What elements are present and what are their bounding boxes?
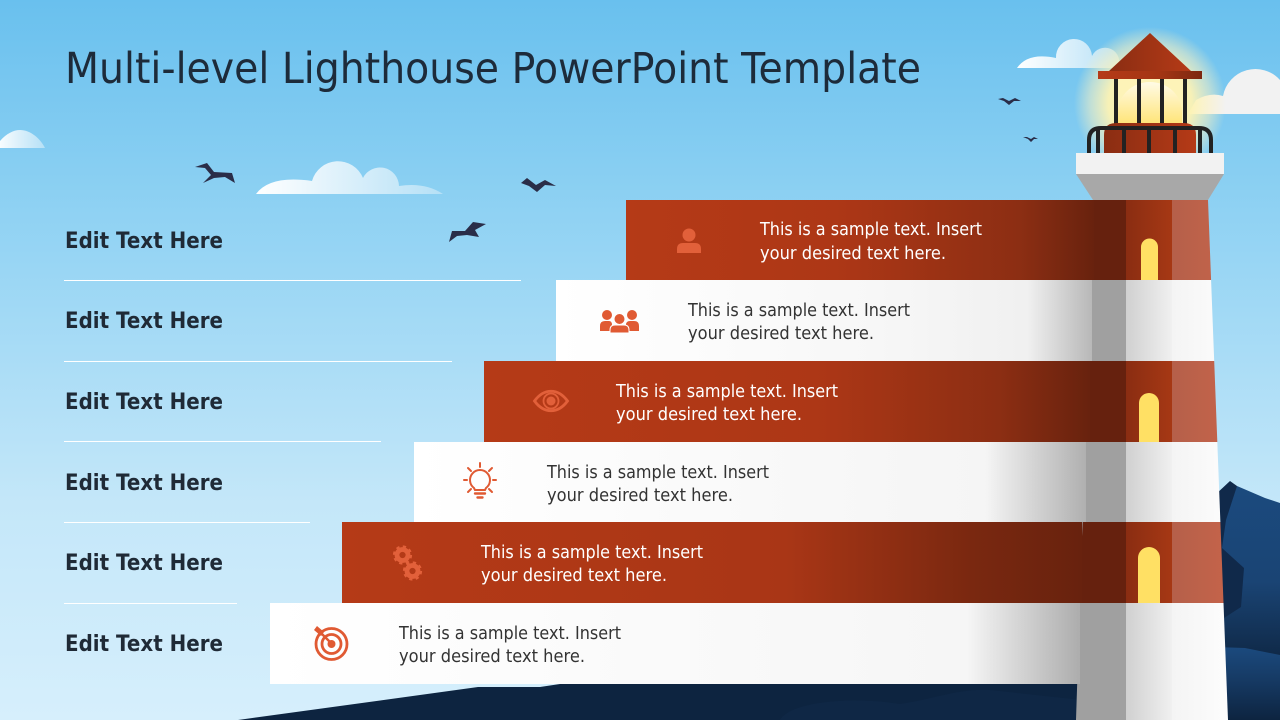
- railing: [1089, 128, 1211, 153]
- label 6: Edit Text Here: [65, 632, 223, 657]
- row 1 text: [759, 220, 982, 264]
- label 1: Edit Text Here: [65, 229, 223, 254]
- row 1 text: your desired text here.: [760, 244, 946, 264]
- icon: eye: [534, 391, 568, 411]
- ground: dark shoreline: [238, 684, 1082, 720]
- icon: person: [677, 228, 701, 253]
- window 1: [1141, 239, 1158, 280]
- window 2: [1139, 393, 1159, 442]
- icon: light bulb: [464, 463, 496, 498]
- bird 3: [449, 222, 486, 242]
- bird 5: [1023, 137, 1038, 142]
- row 4 text: This is a sample text. Insert: [546, 463, 769, 483]
- row 3 text: This is a sample text. Insert: [615, 382, 838, 402]
- tower body with bands: [1076, 200, 1228, 720]
- title: Multi-level Lighthouse PowerPoint Template: [65, 44, 921, 94]
- row 2 band: [556, 280, 1092, 361]
- gallery deck: [1076, 153, 1224, 174]
- divider 4: [64, 522, 310, 523]
- cloud: right of lighthouse: [1188, 69, 1280, 114]
- row 2 text: [687, 301, 910, 344]
- window 3: [1138, 547, 1160, 603]
- row 6 text: your desired text here.: [399, 647, 585, 667]
- divider 2: [64, 361, 452, 362]
- bird 2: [521, 178, 556, 192]
- lighthouse: [1074, 27, 1226, 200]
- lantern glow: [1074, 27, 1226, 179]
- row 5 text: This is a sample text. Insert: [480, 543, 703, 563]
- lantern base: [1104, 123, 1196, 153]
- roof: [1098, 33, 1202, 79]
- label 2: Edit Text Here: [65, 309, 223, 334]
- row 6 text: This is a sample text. Insert: [398, 624, 621, 644]
- cloud: top near lighthouse: [1017, 39, 1119, 68]
- row 2 text: your desired text here.: [688, 324, 874, 344]
- row 1 band: [626, 200, 1094, 280]
- cloud: far left: [0, 130, 45, 148]
- lantern glass: [1114, 79, 1187, 125]
- divider 1: [64, 280, 521, 281]
- bird 1: [195, 163, 235, 183]
- row 5 text: your desired text here.: [481, 566, 667, 586]
- icon: team: [600, 310, 639, 333]
- cloud: centre: [256, 161, 443, 194]
- row 6 band: [270, 603, 1080, 684]
- label 3: Edit Text Here: [65, 390, 223, 415]
- icon: target: [314, 626, 347, 660]
- bird 4: [998, 98, 1021, 105]
- row 4 text: your desired text here.: [547, 486, 733, 506]
- divider 3: [64, 441, 381, 442]
- row 2 text: This is a sample text. Insert: [687, 301, 910, 321]
- divider 5: [64, 603, 237, 604]
- icon: gears: [394, 546, 421, 580]
- row 5 text: [480, 543, 703, 586]
- label 5: Edit Text Here: [65, 551, 223, 576]
- label 4: Edit Text Here: [65, 471, 223, 496]
- row 5 band: [342, 522, 1082, 603]
- gallery support: [1076, 174, 1224, 200]
- row 1 text: This is a sample text. Insert: [759, 220, 982, 240]
- mountains on the right: [1215, 481, 1280, 720]
- row 4 text: [546, 463, 769, 506]
- row 3 band: [484, 361, 1090, 442]
- row 4 band: [414, 442, 1086, 522]
- row 3 text: [615, 382, 838, 425]
- row 3 text: your desired text here.: [616, 405, 802, 425]
- row 6 text: [398, 624, 621, 667]
